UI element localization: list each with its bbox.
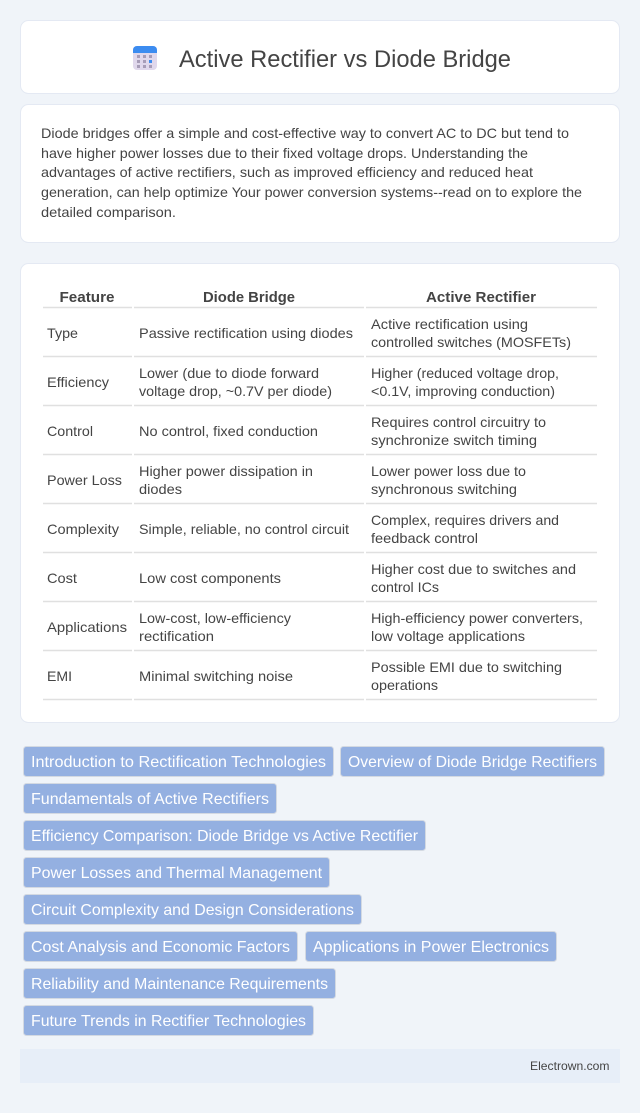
tag: power losses — [24, 858, 330, 888]
row: emi — [47, 659, 562, 693]
panel: title header — [20, 20, 620, 94]
tag: circuit complexity — [24, 894, 362, 924]
row: control: No control, fixed conduction — [139, 423, 318, 439]
table header: Diode Bridge — [203, 289, 295, 306]
row: efficiency: Lower (due to diode forward — [139, 365, 319, 381]
tag: fundamentals — [24, 784, 276, 814]
intro text block: have higher power losses due to their fixed voltage drops. Understanding the — [41, 145, 528, 161]
topic tags — [24, 746, 604, 1036]
row: power loss: Power Loss — [47, 472, 122, 488]
row: type: Active rectification using — [371, 316, 528, 332]
row: efficiency: Efficiency — [47, 374, 109, 390]
title: Active Rectifier vs Diode Bridge — [179, 46, 511, 73]
tag: applications: Applications in Power Electronics — [313, 939, 549, 956]
panel: comparison table — [20, 264, 620, 722]
row: applications: rectification — [139, 628, 214, 644]
row: emi: operations — [371, 677, 438, 693]
row: power loss: synchronous switching — [371, 481, 517, 497]
panel: introduction — [20, 104, 620, 242]
row: emi: Minimal switching noise — [139, 668, 293, 684]
row: cost: control ICs — [371, 579, 439, 595]
footer: Electrown.com — [530, 1059, 610, 1073]
intro text block: generation, can help optimize Your power conversion systems--read on to explore the — [41, 184, 582, 200]
row: power loss — [47, 463, 526, 497]
row: control: Requires control circuitry to — [371, 414, 546, 430]
row: applications: High-efficiency power converters, — [371, 610, 583, 626]
row: cost: Cost — [47, 570, 77, 586]
row: applications: low voltage applications — [371, 628, 525, 644]
table header: Active Rectifier — [426, 289, 536, 306]
tag: reliability: Reliability and Maintenance Requirements — [31, 976, 328, 993]
table header: Feature — [60, 289, 114, 306]
row: emi: EMI — [47, 668, 72, 684]
row: complexity: Complexity — [47, 521, 119, 537]
row: type: Passive rectification using diodes — [139, 325, 353, 341]
footer — [20, 1049, 620, 1083]
row: applications: Low-cost, low-efficiency — [139, 610, 291, 626]
tag: cost analysis — [24, 932, 298, 962]
row: type: controlled switches (MOSFETs) — [371, 334, 571, 350]
row: efficiency: voltage drop, ~0.7V per diode) — [139, 383, 332, 399]
tag: power losses: Power Losses and Thermal Management — [31, 865, 323, 882]
table header — [60, 289, 536, 306]
row: efficiency — [47, 365, 559, 399]
tag: fundamentals: Fundamentals of Active Rectifiers — [31, 791, 269, 808]
row: cost: Higher cost due to switches and — [371, 561, 576, 577]
tag: reliability — [24, 968, 336, 998]
tag: efficiency: Efficiency Comparison: Diode Bridge vs Active Rectifier — [31, 828, 419, 845]
row: control: Control — [47, 423, 93, 439]
row: complexity: Complex, requires drivers and — [371, 512, 559, 528]
row: complexity — [47, 512, 559, 546]
row: control: synchronize switch timing — [371, 432, 537, 448]
icon: calendar — [133, 46, 157, 70]
row: applications: Applications — [47, 619, 127, 635]
row: control — [47, 414, 546, 448]
tag: introduction: Introduction to Rectification Technologies — [31, 754, 326, 771]
row: cost — [47, 561, 576, 595]
intro text block: Diode bridges offer a simple and cost-effective way to convert AC to DC but tend to — [41, 125, 569, 141]
row: type — [47, 316, 571, 350]
row: efficiency: Higher (reduced voltage drop, — [371, 365, 559, 381]
tag: future trends: Future Trends in Rectifier Technologies — [31, 1013, 306, 1030]
row: emi: Possible EMI due to switching — [371, 659, 562, 675]
tag: circuit complexity: Circuit Complexity and Design Considerations — [31, 902, 354, 919]
intro text block: advantages of active rectifiers, such as improved efficiency and reduced heat — [41, 164, 533, 180]
row: cost: Low cost components — [139, 570, 281, 586]
tag: efficiency — [24, 820, 426, 850]
row: complexity: Simple, reliable, no control circuit — [139, 521, 349, 537]
tag: future trends — [24, 1006, 314, 1036]
tag: introduction — [24, 746, 334, 776]
tag: applications — [306, 932, 556, 962]
row: power loss: Lower power loss due to — [371, 463, 526, 479]
tag: overview: Overview of Diode Bridge Rectifiers — [348, 754, 597, 771]
tag: cost analysis: Cost Analysis and Economic Factors — [31, 939, 290, 956]
row: power loss: Higher power dissipation in — [139, 463, 313, 479]
row: applications — [47, 610, 583, 644]
row: power loss: diodes — [139, 481, 182, 497]
row: type: Type — [47, 325, 78, 341]
tag: overview — [340, 746, 604, 776]
row: efficiency: <0.1V, improving conduction) — [371, 383, 555, 399]
row: complexity: feedback control — [371, 530, 478, 546]
intro text block: detailed comparison. — [41, 204, 176, 220]
intro text block — [41, 125, 582, 220]
